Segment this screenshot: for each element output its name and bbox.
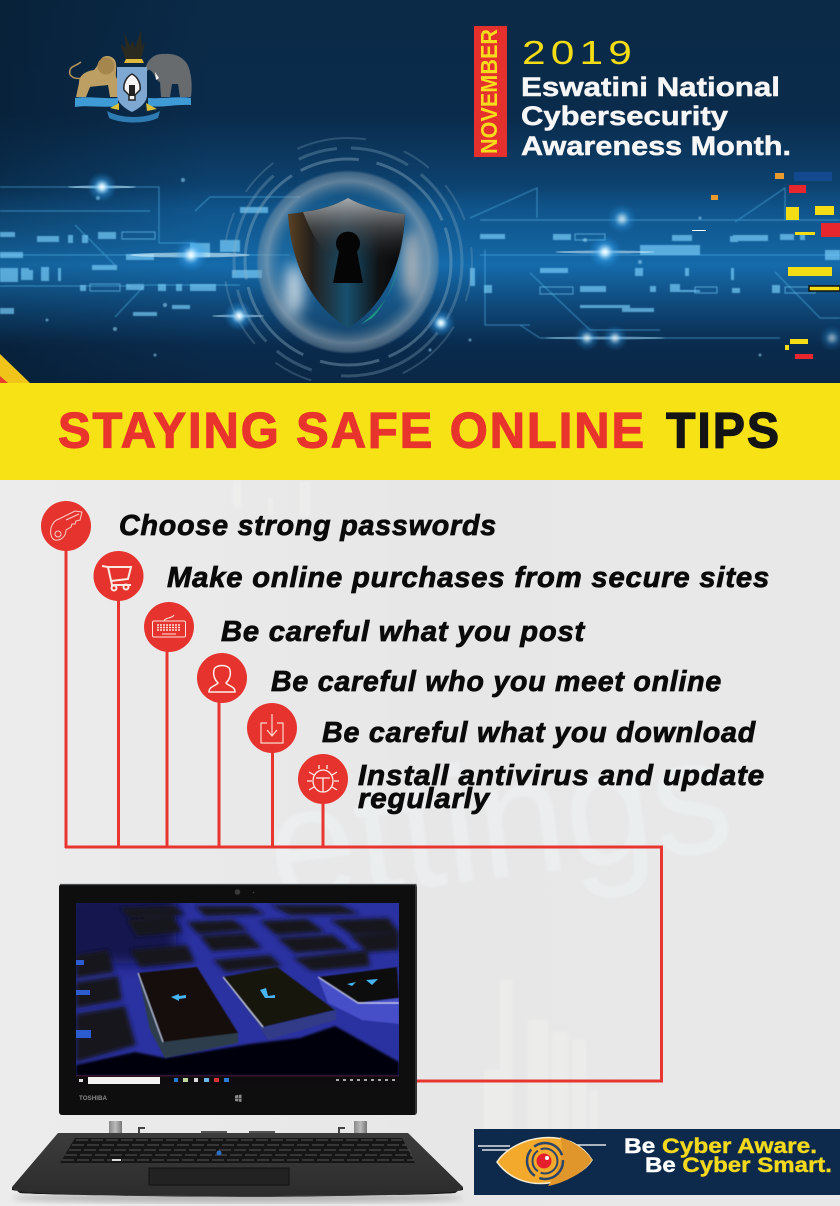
decorative coloured blocks	[711, 172, 840, 359]
tip 2: secure sites	[94, 551, 770, 601]
slogan: Be Cyber Aware.	[624, 1135, 817, 1158]
tip 4: who you meet	[197, 653, 722, 703]
circuit board graphic	[0, 178, 840, 356]
header title: 2019	[522, 34, 637, 71]
ribbon	[75, 97, 118, 107]
icon: shopping cart	[94, 551, 144, 601]
vertical label: November: NOVEMBER	[476, 29, 502, 154]
tip 6: antivirus	[298, 754, 765, 815]
banner: Be Cyber Aware	[474, 1129, 840, 1195]
header title: Eswatini National	[521, 72, 780, 102]
corner accent	[0, 354, 30, 383]
icon: elephant	[145, 54, 192, 97]
feathers	[120, 30, 145, 60]
slogan	[624, 1135, 832, 1177]
text: Be careful what you download	[322, 717, 756, 749]
icon: windows logo	[235, 1094, 242, 1102]
screen wallpaper: backlit keys	[66, 893, 399, 1076]
text: Install antivirus and update	[358, 760, 765, 792]
text: Be careful what you post	[221, 616, 586, 648]
icon: coat of arms emblem	[70, 30, 192, 122]
icon: key	[41, 501, 91, 551]
icon: keyboard	[144, 602, 194, 652]
icon: download	[247, 703, 297, 753]
icon: cyber eye	[478, 1137, 606, 1186]
connector lines	[65, 545, 662, 1081]
text	[358, 760, 765, 815]
panel: tips background: ettings	[257, 700, 741, 940]
laptop illustration	[12, 884, 463, 1203]
header title: Cybersecurity	[521, 101, 728, 131]
header title: Awareness Month.	[521, 131, 791, 161]
tip 5: what you download	[247, 703, 756, 753]
tip 3: what you post	[144, 602, 586, 652]
icon: blue shield	[117, 67, 147, 112]
text: Be careful who you meet online	[271, 666, 722, 698]
keyboard base	[12, 1121, 463, 1203]
icon: user	[197, 653, 247, 703]
icon: bug	[298, 754, 348, 804]
text: regularly	[358, 783, 491, 815]
heading: STAYING SAFE ONLINE	[58, 402, 646, 458]
keycaps with arrow glyphs	[138, 967, 399, 1058]
icon: lion	[70, 56, 118, 97]
panel: header banner	[0, 0, 840, 386]
tip 1: strong passwords	[41, 501, 497, 551]
text: Choose strong passwords	[119, 510, 497, 542]
laptop tablet screen	[59, 884, 417, 1115]
panel: tips background	[0, 480, 840, 1206]
header title	[521, 34, 791, 161]
icon: shield with keyhole	[288, 198, 405, 328]
shield rings	[224, 138, 472, 386]
taskbar	[76, 1076, 399, 1085]
title band	[0, 383, 840, 480]
light flares	[68, 172, 840, 351]
text: Make online purchases from secure sites	[167, 562, 770, 594]
heading: TIPS	[666, 402, 781, 458]
slogan: Be Cyber Smart.	[645, 1154, 832, 1177]
brand mark: TOSHIBA	[79, 1095, 107, 1102]
